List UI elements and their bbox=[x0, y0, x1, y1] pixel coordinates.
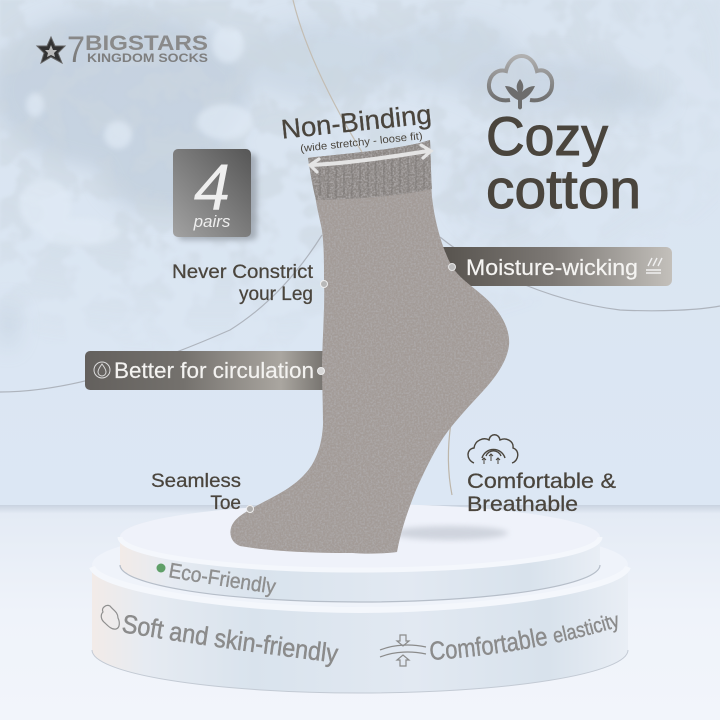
marker dot: circulation bbox=[318, 368, 324, 374]
heading: cozy cotton bbox=[486, 105, 641, 220]
callout: comfortable and breathable: Comfortable & bbox=[467, 470, 616, 493]
icon: water drop bbox=[94, 362, 110, 378]
badge: 4 pairs bbox=[173, 149, 257, 240]
mottled foliage texture bbox=[2, 2, 575, 264]
side label: comfortable elasticity bbox=[380, 615, 618, 667]
background wall bbox=[0, 0, 720, 510]
callout pill: better for circulation bbox=[85, 351, 330, 390]
callout: comfortable and breathable bbox=[467, 470, 616, 516]
cuff ribs bbox=[320, 152, 424, 198]
icon: moisture lines bbox=[646, 258, 662, 273]
heading: cozy cotton: cotton bbox=[486, 158, 641, 220]
light patches bbox=[19, 27, 253, 246]
podium: lower tier bbox=[90, 566, 630, 694]
sock shadow bbox=[392, 526, 508, 540]
side label: comfortable elasticity: Comfortable elasticity bbox=[430, 615, 618, 660]
callout: seamless toe: Seamless bbox=[151, 471, 241, 492]
heading: cozy cotton: Cozy bbox=[486, 105, 608, 167]
callout: never constrict: your Leg bbox=[239, 284, 313, 305]
logo bbox=[37, 29, 208, 70]
podium: upper tier bbox=[118, 504, 602, 603]
badge: 4 pairs: pairs bbox=[193, 212, 231, 231]
callout: never constrict: Never Constrict bbox=[172, 262, 314, 283]
marker dot: moisture bbox=[448, 264, 456, 270]
callout: never constrict bbox=[172, 262, 328, 305]
logo: KINGDOM SOCKS bbox=[87, 51, 208, 65]
floor bbox=[0, 505, 720, 720]
callout pill: better for circulation: Better for circulation bbox=[114, 358, 314, 383]
callout pill: moisture-wicking: Moisture-wicking bbox=[466, 255, 638, 280]
icon: cotton boll bbox=[489, 56, 552, 110]
sock cuff bbox=[308, 140, 432, 200]
callout pill: moisture-wicking bbox=[436, 247, 672, 286]
side label: soft and skin-friendly: Soft and skin-friendly bbox=[122, 615, 339, 668]
callout: comfortable and breathable: Breathable bbox=[467, 493, 578, 516]
sock bbox=[230, 140, 509, 554]
side label: eco-friendly: Eco-Friendly bbox=[169, 562, 276, 598]
icon: breathable cloud bbox=[468, 435, 518, 464]
badge: 4 pairs: 4 bbox=[194, 150, 230, 224]
callout: seamless toe bbox=[151, 471, 254, 514]
stretch arrow bbox=[310, 145, 431, 172]
leaf shadows bbox=[0, 10, 670, 350]
callout: seamless toe: Toe bbox=[210, 493, 241, 514]
heading: non-binding: (wide stretchy - loose fit) bbox=[300, 130, 423, 155]
heading: non-binding: Non-Binding bbox=[280, 99, 433, 145]
logo: 7 bbox=[67, 29, 85, 70]
logo star bbox=[37, 37, 65, 63]
background curves bbox=[0, 0, 720, 495]
logo: BIGSTARS bbox=[85, 32, 208, 55]
